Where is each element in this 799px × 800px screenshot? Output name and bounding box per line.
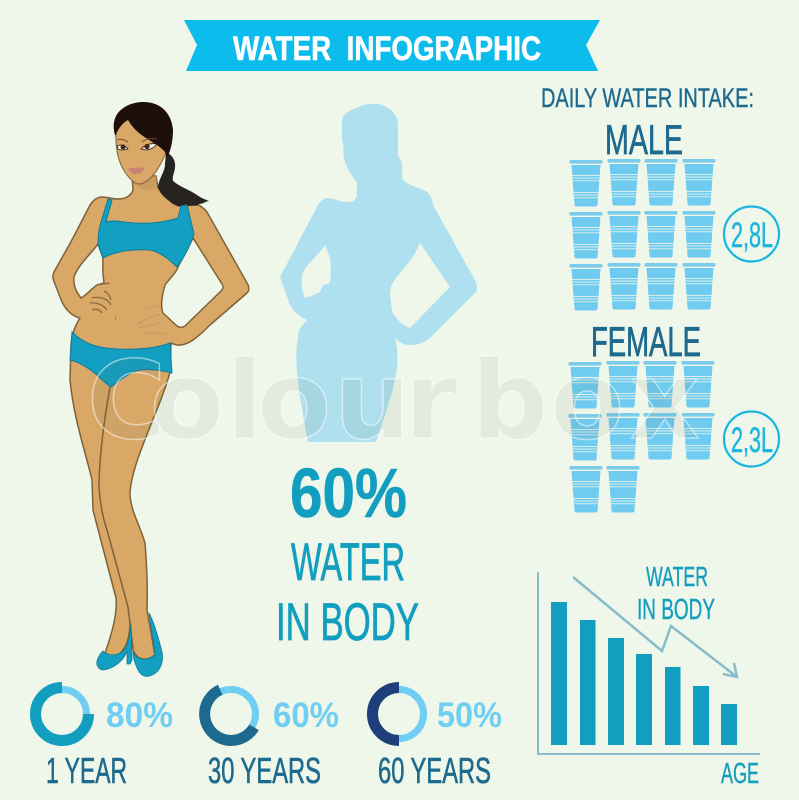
heading: male: MALE — [605, 116, 683, 163]
title banner — [184, 20, 600, 71]
arrow: declining trend — [573, 577, 737, 677]
lips — [128, 168, 145, 174]
neck shadow — [133, 176, 157, 190]
cups: female 10 cups — [568, 361, 714, 512]
callout: 2,3L — [724, 412, 779, 466]
donut: 60 years 50%: 50% — [437, 696, 502, 735]
silhouette with water level — [280, 104, 477, 442]
bar chart: water in body by age: IN BODY — [637, 594, 715, 626]
donut: 1 year 80%: 1 YEAR — [46, 750, 127, 791]
cups: male 12 cups — [570, 159, 716, 310]
donut: 30 years 60%: 60% — [273, 696, 339, 735]
callout: 2,8L — [724, 206, 779, 262]
bar chart: water in body by age: WATER — [646, 561, 708, 592]
navel — [114, 316, 117, 320]
donut: 30 years 60%: 30 YEARS — [208, 750, 321, 791]
left shoe — [97, 623, 132, 670]
bar chart: water in body by age — [538, 561, 760, 790]
hand right — [137, 306, 165, 334]
callout: 2,3L: 2,3L — [731, 421, 773, 460]
face — [116, 115, 168, 184]
callout: 2,8L: 2,8L — [731, 216, 773, 255]
stat: 60% water in body — [276, 454, 419, 652]
ponytail — [158, 152, 209, 207]
body skin — [53, 176, 249, 659]
bikini top — [98, 199, 194, 267]
donut: 60 years 50% — [373, 688, 502, 791]
stat: 60% water in body: 60% — [290, 454, 407, 532]
eyes — [117, 138, 157, 150]
leg line — [99, 387, 133, 648]
bikini bottom — [70, 332, 172, 387]
donut: 1 year 80%: 80% — [106, 696, 173, 735]
right shoe — [133, 613, 163, 676]
stat: 60% water in body: WATER — [291, 533, 405, 592]
donut: 30 years 60% — [205, 690, 339, 791]
title: WATER INFOGRAPHIC — [233, 30, 541, 68]
heading: female: FEMALE — [591, 318, 701, 365]
stat: 60% water in body: IN BODY — [276, 593, 419, 652]
donut: 1 year 80% — [36, 688, 173, 791]
hair — [114, 102, 173, 158]
hand left — [90, 283, 111, 313]
illustration: woman in swimsuit — [53, 102, 249, 676]
donut: 60 years 50%: 60 YEARS — [378, 750, 491, 791]
bar chart: water in body by age: AGE — [721, 758, 759, 790]
watermark: Colourbox — [87, 339, 700, 464]
